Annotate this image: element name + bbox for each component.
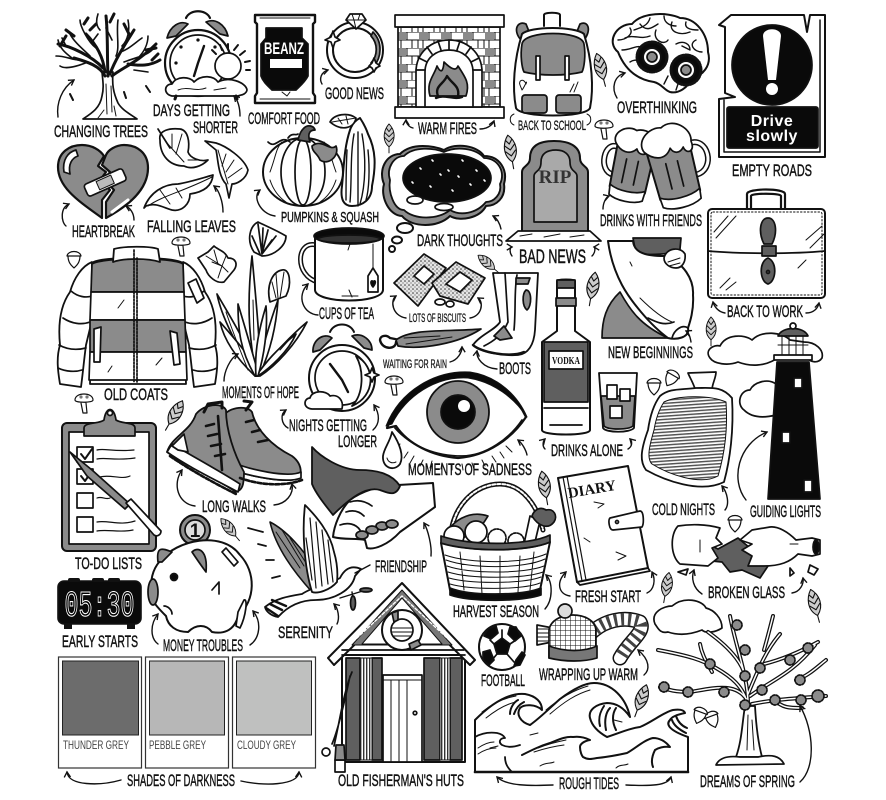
label: broken glass: BROKEN GLASS bbox=[708, 583, 785, 602]
arrow: fresh start left bbox=[560, 572, 570, 596]
arrow: dark thoughts bbox=[493, 216, 501, 229]
label: cold nights: COLD NIGHTS bbox=[652, 500, 715, 519]
arrow: moments of hope bbox=[224, 354, 238, 381]
label: empty roads: EMPTY ROADS bbox=[732, 161, 812, 180]
icon: rough waves bbox=[475, 683, 688, 772]
icon: pumpkin and squash bbox=[263, 115, 375, 206]
label: to-do lists: TO-DO LISTS bbox=[75, 554, 142, 573]
label: lots of biscuits: LOTS OF BISCUITS bbox=[409, 311, 466, 325]
text: CUPS OF TEA bbox=[319, 304, 374, 323]
label: warm fires: WARM FIRES bbox=[418, 119, 477, 138]
panel: pebble grey swatch: PEBBLE GREY bbox=[149, 738, 206, 752]
label: nights getting longer: LONGER bbox=[338, 432, 377, 451]
arrow: broken glass left bbox=[693, 570, 702, 594]
icon: woolly hat and scarf bbox=[537, 604, 641, 661]
arrow: moments of sadness bbox=[518, 440, 527, 455]
label: money troubles: MONEY TROUBLES bbox=[163, 636, 243, 655]
label: sign text: slowly bbox=[746, 128, 798, 145]
label: harvest season: HARVEST SEASON bbox=[453, 602, 539, 621]
arrow: money troubles right bbox=[250, 611, 259, 645]
arrow: new beginnings bbox=[686, 331, 691, 342]
label: days getting shorter bbox=[153, 101, 238, 137]
label: boots: BOOTS bbox=[499, 359, 531, 378]
label: back to work: BACK TO WORK bbox=[727, 302, 803, 321]
arrow: friendship bbox=[424, 523, 431, 556]
label: shades of darkness: SHADES OF DARKNESS bbox=[127, 771, 235, 790]
arrow: wrapping up warm bbox=[638, 650, 648, 675]
label: early starts: EARLY STARTS bbox=[62, 632, 138, 651]
icon: briefcase bbox=[708, 190, 825, 298]
arrow: drinks with friends bbox=[603, 196, 609, 209]
icon: furled umbrella bbox=[380, 329, 481, 348]
arrow: shades right bbox=[241, 772, 299, 784]
arrow: cold nights bbox=[722, 486, 728, 510]
icon: handshake bbox=[312, 447, 435, 548]
arrow: harvest season right bbox=[545, 575, 551, 609]
arrow: falling leaves bbox=[214, 186, 223, 212]
icon: piggy bank with coin bbox=[148, 515, 252, 633]
arrow: waiting for rain bbox=[450, 347, 462, 362]
icon: road sign bbox=[719, 15, 825, 157]
label: serenity: SERENITY bbox=[278, 623, 333, 642]
label: comfort food: COMFORT FOOD bbox=[248, 109, 320, 128]
arrow: nights getting longer left bbox=[282, 410, 288, 428]
arrow: overthinking bbox=[614, 73, 625, 98]
icon: diamond ring bbox=[325, 14, 383, 78]
label: waiting for rain: WAITING FOR RAIN bbox=[383, 357, 447, 371]
icon: dark thoughts cloud bbox=[382, 146, 505, 252]
icon: digital alarm clock: 05:30 bbox=[64, 586, 134, 627]
icon: alarm clock with sun bbox=[165, 11, 250, 99]
label: nights getting longer: NIGHTS GETTING bbox=[289, 416, 367, 435]
icon: backpack bbox=[514, 13, 592, 116]
label: wrapping up warm: WRAPPING UP WARM bbox=[539, 665, 638, 684]
arrow: heartbreak right bbox=[126, 206, 134, 220]
label: days getting shorter: SHORTER bbox=[193, 118, 238, 137]
arrow: guiding lights bbox=[738, 432, 767, 500]
label: coin value: 1 bbox=[190, 521, 201, 542]
label: back to school bbox=[510, 114, 591, 133]
label: heartbreak: HEARTBREAK bbox=[72, 222, 135, 241]
icon: hiking boots bbox=[167, 401, 302, 494]
label: long walks: LONG WALKS bbox=[202, 497, 266, 516]
icon: football bbox=[479, 624, 525, 670]
label: bad news bbox=[510, 247, 595, 268]
icon: biscuits bbox=[394, 254, 485, 307]
icon: pregnant belly bbox=[602, 238, 693, 339]
icon: crocus flowers bbox=[198, 222, 307, 376]
arrow: boots bbox=[477, 351, 497, 369]
label: guiding lights: GUIDING LIGHTS bbox=[750, 502, 821, 521]
icon: night clock with moon bbox=[305, 324, 379, 411]
arrow: rough tides left bbox=[497, 777, 553, 785]
label: diary title: DIARY bbox=[567, 478, 618, 502]
label: sign text: Drive bbox=[751, 113, 793, 130]
label: rip: RIP bbox=[539, 167, 572, 188]
arrow: back to work right bbox=[806, 303, 819, 313]
arrow: back to work left bbox=[713, 302, 725, 313]
arrow: days getting shorter bbox=[234, 96, 240, 116]
icon: broken bottle bbox=[672, 525, 820, 578]
icon: brain with cogs bbox=[613, 14, 709, 92]
label: nights getting longer bbox=[289, 416, 377, 451]
label: changing trees: CHANGING TREES bbox=[54, 122, 148, 141]
label: sign text bbox=[746, 113, 798, 145]
decorative: small autumn leaves, acorns and mushrooms bbox=[67, 52, 825, 730]
arrow: shades left bbox=[67, 772, 121, 784]
arrow: long walks right bbox=[274, 484, 292, 505]
panel: cloudy grey swatch bbox=[232, 657, 316, 768]
label: bad news: BAD NEWS bbox=[519, 247, 586, 268]
icon: broken heart bbox=[58, 145, 148, 218]
label: vodka: VODKA bbox=[552, 356, 581, 367]
arrow: nights getting longer right bbox=[373, 405, 378, 430]
icon: harvest basket bbox=[441, 484, 556, 600]
panel: thunder grey swatch bbox=[58, 657, 142, 768]
icon: digital alarm clock bbox=[58, 578, 141, 629]
icon: whisky tumbler bbox=[599, 373, 637, 432]
icon: wellington boots bbox=[473, 273, 538, 355]
panel: cloudy grey swatch: CLOUDY GREY bbox=[237, 738, 296, 752]
icon: blossom tree bbox=[654, 600, 826, 765]
label: overthinking: OVERTHINKING bbox=[617, 98, 697, 117]
label: dark thoughts: DARK THOUGHTS bbox=[417, 231, 503, 250]
icon: clipboard with pen bbox=[62, 410, 161, 551]
icon: gravestone bbox=[506, 141, 601, 241]
icon: clinking beer mugs bbox=[596, 116, 718, 214]
label: friendship: FRIENDSHIP bbox=[375, 557, 427, 576]
arrow: broken glass right bbox=[792, 578, 803, 593]
arrow: changing trees bbox=[58, 80, 74, 117]
label: drinks alone: DRINKS ALONE bbox=[551, 441, 623, 460]
icon: diary bbox=[558, 466, 650, 585]
icon: bare tree bbox=[56, 14, 160, 119]
label: beanz brand: BEANZ bbox=[264, 39, 304, 58]
label: rough tides: ROUGH TIDES bbox=[559, 774, 619, 793]
icon: puffer coat bbox=[58, 247, 217, 387]
arrow: cups of tea bbox=[302, 284, 318, 315]
arrow: serenity bbox=[334, 604, 338, 624]
label: fresh start: FRESH START bbox=[575, 587, 641, 606]
arrow: fresh start right bbox=[647, 572, 654, 593]
panel: pebble grey swatch bbox=[146, 657, 228, 768]
arrow: dreams of spring bbox=[800, 706, 811, 782]
label: drinks alone bbox=[543, 439, 632, 460]
arrow: lots of biscuits bbox=[393, 296, 406, 318]
icon: vodka bottle bbox=[542, 280, 590, 434]
label: falling leaves: FALLING LEAVES bbox=[147, 217, 236, 236]
panel: thunder grey swatch: THUNDER GREY bbox=[63, 738, 129, 752]
arrow: long walks left bbox=[177, 470, 195, 506]
label: drinks with friends: DRINKS WITH FRIENDS bbox=[600, 211, 702, 230]
arrow: money troubles left bbox=[152, 614, 158, 644]
label: back to school: BACK TO SCHOOL bbox=[518, 117, 586, 133]
arrow: heartbreak left bbox=[62, 204, 69, 226]
label: dreams of spring: DREAMS OF SPRING bbox=[700, 772, 795, 791]
icon: brick fireplace bbox=[395, 15, 504, 118]
arrow: rough tides right bbox=[626, 777, 671, 785]
label: pumpkins and squash: PUMPKINS & SQUASH bbox=[281, 209, 379, 226]
label: old coats: OLD COATS bbox=[104, 385, 168, 404]
icon: dove with olive branch bbox=[248, 505, 372, 617]
icon: crying eye bbox=[383, 372, 527, 470]
icon: fisherman's hut bbox=[322, 583, 475, 772]
text: FOOTBALL bbox=[481, 671, 525, 690]
icon: tin mug with teabag bbox=[300, 228, 384, 300]
label: moments of sadness: MOMENTS OF SADNESS bbox=[408, 460, 532, 479]
arrow: pumpkins and squash bbox=[257, 190, 275, 216]
label: days getting shorter: DAYS GETTING bbox=[153, 101, 230, 120]
arrow: warm fires right bbox=[480, 121, 494, 129]
label: good news: GOOD NEWS bbox=[325, 84, 384, 103]
icon: hot water bottle bbox=[642, 372, 733, 487]
arrow: biscuits right bbox=[470, 298, 481, 318]
label: new beginnings: NEW BEGINNINGS bbox=[608, 343, 693, 362]
label: old fisherman's huts: OLD FISHERMAN'S HUTS bbox=[338, 771, 464, 790]
text: MOMENTS OF HOPE bbox=[222, 383, 299, 402]
icon: lighthouse with clouds bbox=[708, 323, 822, 499]
icon: beanz tin bbox=[255, 15, 315, 103]
icon: falling leaves bbox=[144, 129, 248, 210]
arrow: warm fires bbox=[406, 120, 413, 128]
arrow: good news bbox=[321, 70, 328, 84]
